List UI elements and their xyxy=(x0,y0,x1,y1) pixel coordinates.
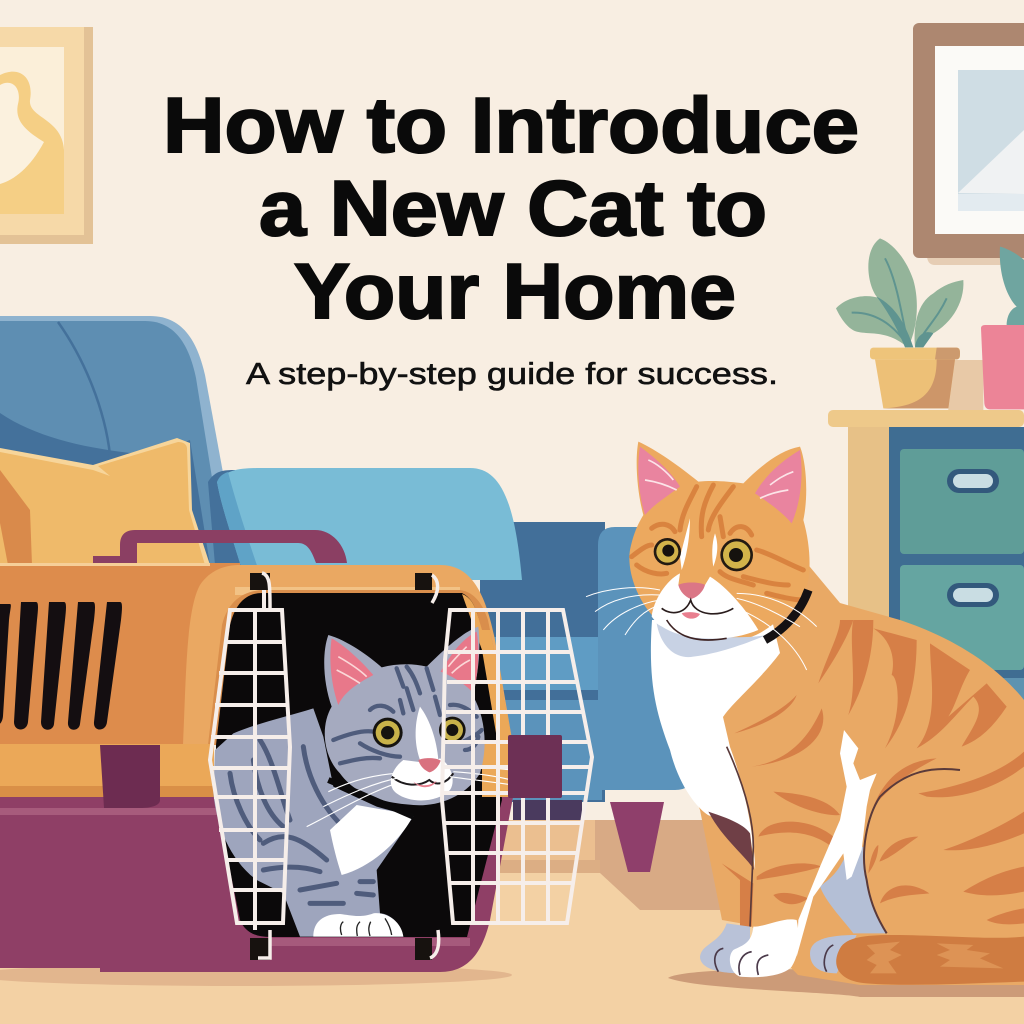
carrier opening xyxy=(216,593,502,937)
carrier clasp xyxy=(100,745,160,808)
orange cat body xyxy=(660,555,1024,985)
cat: grey xyxy=(213,627,533,937)
orange cat stripes xyxy=(722,620,1024,927)
carrier handle xyxy=(93,530,347,563)
title: Your Home xyxy=(294,247,736,335)
sofa leg xyxy=(610,802,664,872)
light blue cushion xyxy=(217,468,522,580)
sofa seat and back xyxy=(480,522,605,802)
pink pot plant xyxy=(981,247,1024,409)
dresser xyxy=(828,410,1024,827)
framed picture: left wall xyxy=(0,27,93,244)
orange cat tail xyxy=(836,935,1024,985)
subtitle: A step-by-step guide for success. xyxy=(246,356,778,391)
floor shadow: carrier xyxy=(0,964,512,986)
yellow cushion xyxy=(0,438,210,565)
grey cat paws xyxy=(313,913,403,937)
orange cat chest xyxy=(651,620,780,870)
title: a New Cat to xyxy=(259,164,767,252)
carrier right clasp xyxy=(508,735,562,798)
blue sofa xyxy=(0,316,692,872)
floor shadow: orange cat xyxy=(668,969,1024,997)
carrier lower shell xyxy=(0,797,513,972)
orange cat xyxy=(586,442,1024,985)
grey cat head xyxy=(324,627,485,805)
title: How to Introduce xyxy=(163,81,859,169)
door hinges xyxy=(250,573,439,960)
sofa arm xyxy=(598,527,692,790)
orange cat leg markings xyxy=(700,730,1024,985)
orange cat paws xyxy=(700,919,857,977)
door: closed side xyxy=(210,585,290,930)
framed picture: right wall xyxy=(913,23,1024,265)
white muzzle and fur shadow xyxy=(629,442,810,640)
door: open side xyxy=(442,610,592,923)
pet carrier xyxy=(0,530,592,972)
orange cat head xyxy=(586,442,817,670)
title xyxy=(163,81,859,335)
carrier rim xyxy=(0,744,513,797)
carrier vents xyxy=(0,602,122,730)
potted plant and shelf items xyxy=(836,238,983,410)
carrier top shell xyxy=(0,563,240,745)
